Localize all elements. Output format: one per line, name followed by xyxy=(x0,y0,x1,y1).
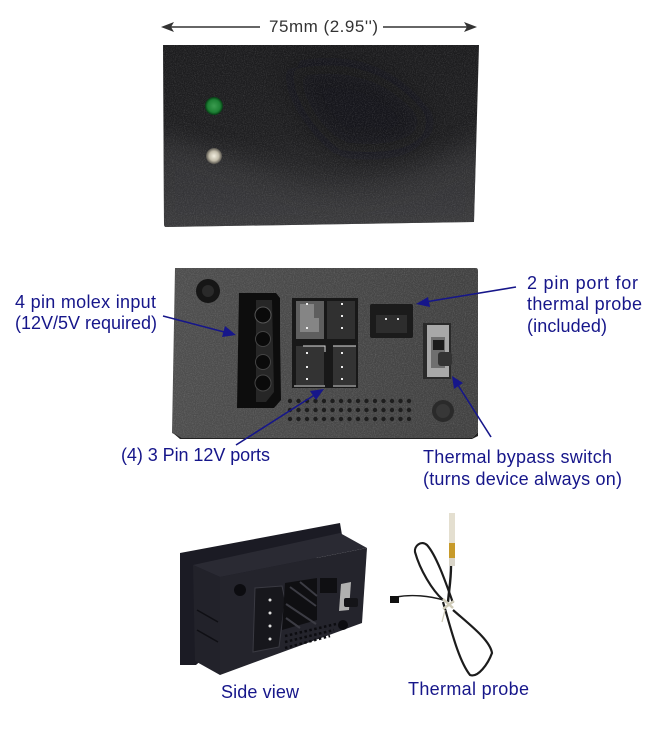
callout: 2 pin port: 2 pin port for xyxy=(527,273,638,293)
2 pin port on side view xyxy=(320,578,337,593)
ports grid on side view xyxy=(282,578,317,630)
callout: molex input: (12V/5V required) xyxy=(15,313,157,333)
photo: device front panel xyxy=(163,45,479,227)
switch on side view xyxy=(339,582,351,611)
icon: top-left screw xyxy=(196,279,220,303)
four 3-pin 12V ports xyxy=(292,298,358,388)
photo: side view of device xyxy=(180,523,367,675)
callout: 2 pin port xyxy=(416,273,642,336)
caption: side view: Side view xyxy=(221,682,300,702)
callout: bypass switch xyxy=(423,376,622,489)
arrow: to molex connector xyxy=(163,316,236,337)
callout: 3 pin ports xyxy=(121,389,324,465)
icon: green LED xyxy=(205,97,223,115)
ventilation holes xyxy=(288,399,411,421)
screw holes on side view xyxy=(234,584,246,596)
caption: thermal probe: Thermal probe xyxy=(408,679,529,699)
photo: device rear panel with connectors xyxy=(172,268,478,439)
callout: 2 pin port: thermal probe xyxy=(527,294,642,314)
vent holes on side view xyxy=(285,624,336,648)
callout: molex input xyxy=(15,292,236,337)
arrow: to 2 pin port xyxy=(416,287,516,307)
molex connector on side view xyxy=(253,586,285,652)
connector plug xyxy=(390,596,399,603)
photo: thermal probe cable xyxy=(390,513,492,675)
molex connector xyxy=(237,293,281,408)
thermal bypass switch xyxy=(423,323,452,379)
dimension arrow: 75mm width xyxy=(161,17,477,36)
callout: molex input: 4 pin molex input xyxy=(15,292,156,312)
probe tip xyxy=(449,513,455,566)
arrow: to 3 pin ports xyxy=(236,389,324,445)
callout: bypass switch: Thermal bypass switch xyxy=(423,447,612,467)
callout: bypass switch: (turns device always on) xyxy=(423,469,622,489)
icon: bottom-right screw xyxy=(432,400,454,422)
icon: white LED xyxy=(206,148,222,164)
callout: 2 pin port: (included) xyxy=(527,316,607,336)
dimension label: 75mm (2.95'') xyxy=(269,17,378,36)
2-pin thermal probe port xyxy=(370,304,413,338)
arrow: to switch xyxy=(452,376,491,437)
callout: 3 pin ports: (4) 3 Pin 12V ports xyxy=(121,445,270,465)
